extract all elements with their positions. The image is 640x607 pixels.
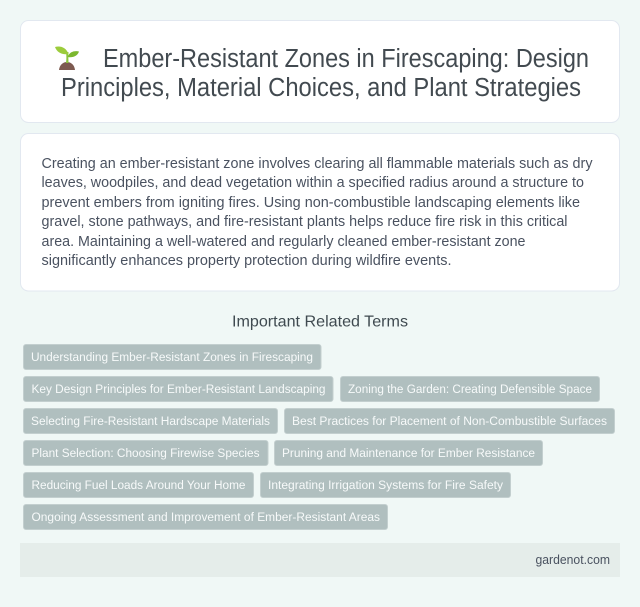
tag: reducing fuel loads: [24, 472, 254, 498]
heading: related terms: Important Related Terms: [232, 314, 408, 330]
tag: placement best practices: [284, 408, 614, 434]
text block: description: gravel, stone pathways, and fire-resistant plants helps reduce fire risk in this critical: [42, 214, 568, 230]
text block: description: leaves, woodpiles, and dead vegetation within a specified radius around a structure to: [42, 175, 584, 191]
tag: pruning and maintenance: Pruning and Maintenance for Ember Resistance: [282, 446, 535, 460]
text block: description: area. Maintaining a well-watered and regularly cleaned ember-resistant zone: [42, 234, 526, 250]
tag list: related terms: [24, 344, 614, 530]
text block: description: Creating an ember-resistant zone involves clearing all flammable materials such as dry: [42, 156, 593, 172]
title: Principles, Material Choices, and Plant Strategies: [61, 74, 581, 102]
title: [61, 45, 589, 102]
tag: pruning and maintenance: [274, 440, 542, 466]
text block: description: prevent embers from igniting fires. Using non-combustible landscaping elements like: [42, 195, 580, 211]
icon: seedling: [55, 46, 79, 70]
tag: understanding: Understanding Ember-Resistant Zones in Firescaping: [31, 350, 313, 364]
footer bar: gardenot.com: [536, 553, 610, 567]
panel: description card: [20, 134, 620, 291]
tag: understanding: [24, 344, 321, 370]
tag: zoning the garden: Zoning the Garden: Creating Defensible Space: [348, 382, 592, 396]
tag: placement best practices: Best Practices for Placement of Non-Combustible Surfaces: [292, 414, 607, 428]
tag: ongoing assessment: Ongoing Assessment and Improvement of Ember-Resistant Areas: [32, 510, 380, 524]
tag: hardscape materials: Selecting Fire-Resistant Hardscape Materials: [31, 414, 270, 428]
tag: zoning the garden: [340, 376, 600, 402]
tag: plant selection: Plant Selection: Choosing Firewise Species: [32, 446, 260, 460]
title: Ember-Resistant Zones in Firescaping: Design: [103, 45, 589, 73]
text block: description: [42, 156, 593, 269]
panel: title card: [20, 20, 620, 122]
tag: ongoing assessment: [24, 504, 388, 530]
tag: irrigation systems: Integrating Irrigation Systems for Fire Safety: [268, 478, 504, 492]
tag: irrigation systems: [260, 472, 510, 498]
tag: plant selection: [24, 440, 268, 466]
footer bar: [20, 543, 620, 577]
tag: key design principles: [24, 376, 333, 402]
tag: reducing fuel loads: Reducing Fuel Loads Around Your Home: [32, 478, 246, 492]
tag: hardscape materials: [24, 408, 278, 434]
text block: description: significantly enhances property protection during wildfire events.: [42, 253, 452, 269]
tag: key design principles: Key Design Principles for Ember-Resistant Landscaping: [32, 382, 326, 396]
